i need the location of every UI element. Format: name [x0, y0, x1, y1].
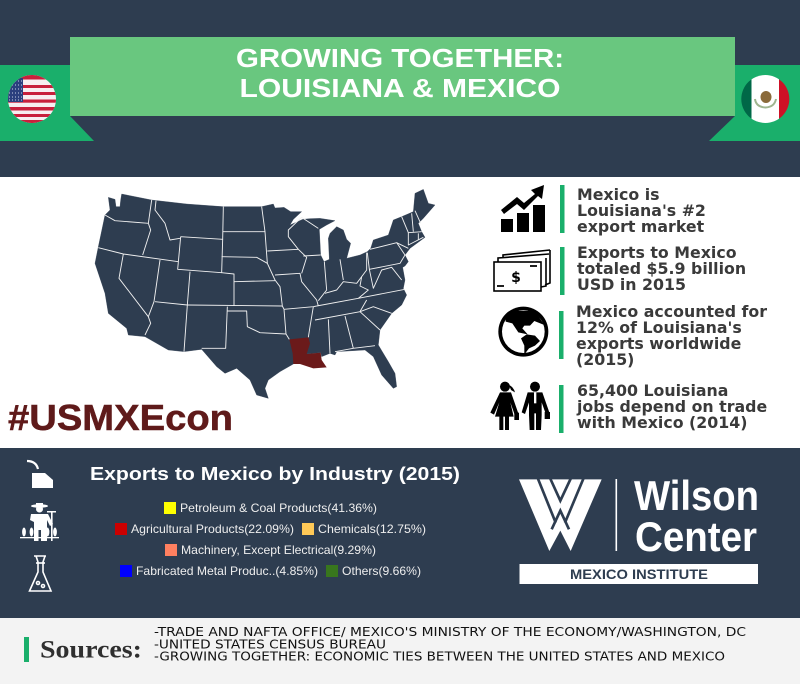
text: jobs depend on trade: [576, 397, 767, 416]
wordmark: Wilson: [634, 472, 759, 519]
accent bar: [559, 385, 564, 433]
fact: export market: [501, 185, 706, 236]
icon: US flag: [8, 75, 56, 124]
icon: farmer: [20, 503, 59, 541]
accent bar: [560, 247, 564, 295]
title banner: [70, 37, 735, 116]
text: Mexico accounted for: [576, 302, 767, 321]
text: Mexico is: [577, 185, 660, 204]
legend: Agricultural Products(22.09%): [131, 522, 294, 536]
logo: Wilson Center Mexico Institute: MEXICO INSTITUTE: [570, 567, 708, 582]
icon: growth chart: [501, 185, 545, 232]
state borders: [98, 200, 423, 353]
legend: [115, 501, 426, 578]
Louisiana: [289, 337, 327, 368]
legend: Chemicals(12.75%): [318, 522, 426, 536]
panel: sources: Sources:: [40, 636, 142, 664]
W mark: [519, 478, 602, 551]
text: exports worldwide: [576, 334, 741, 353]
text: totaled $5.9 billion: [577, 259, 746, 278]
fact: share of exports: [498, 302, 767, 369]
icon: business people: [490, 382, 550, 430]
fact: total exports: $: [511, 270, 521, 286]
icon: Mexico flag: [741, 75, 790, 123]
text: [577, 243, 746, 294]
fact: jobs: [490, 381, 767, 433]
text: export market: [577, 217, 705, 236]
hashtag: #USMXEcon: [8, 397, 233, 438]
accent bar: [560, 185, 564, 233]
title: [236, 45, 564, 103]
icon: cash stack: [494, 250, 550, 291]
panel: exports by industry: [0, 448, 800, 618]
text: Louisiana's #2: [577, 201, 706, 220]
title: LOUISIANA & MEXICO: [240, 75, 560, 103]
panel: sources: -GROWING TOGETHER: ECONOMIC TIES BETWEEN THE UNITED STATES AND MEXICO: [154, 650, 725, 664]
fact: total exports: [494, 243, 746, 295]
icon: flask: [30, 556, 51, 591]
icon: globe: [498, 307, 548, 357]
legend: Petroleum & Coal Products(41.36%): [180, 501, 377, 515]
text: (2015): [576, 350, 634, 369]
right ribbon: [709, 65, 800, 141]
text: [576, 381, 767, 432]
panel: sources: [0, 618, 800, 684]
map: United States with Louisiana highlighted: [95, 189, 435, 398]
panel: sources: -TRADE AND NAFTA OFFICE/ MEXICO'S MINISTRY OF THE ECONOMY/WASHINGTON, DC: [154, 625, 746, 640]
text: 12% of Louisiana's: [576, 318, 742, 337]
panel: header: [0, 0, 800, 177]
legend: Machinery, Except Electrical(9.29%): [181, 543, 376, 557]
accent bar: [559, 311, 564, 359]
icon: oil can: [27, 461, 53, 488]
panel: sources: -UNITED STATES CENSUS BUREAU: [154, 638, 386, 652]
silhouette: [95, 189, 435, 398]
wordmark: [634, 472, 759, 560]
text: 65,400 Louisiana: [577, 381, 728, 400]
title: GROWING TOGETHER:: [236, 45, 564, 73]
left ribbon: [0, 65, 94, 141]
legend: Others(9.66%): [342, 564, 421, 578]
text: Exports to Mexico: [577, 243, 737, 262]
text: [576, 302, 767, 369]
chart heading: Exports to Mexico by Industry (2015): [90, 463, 460, 484]
text: USD in 2015: [577, 275, 686, 294]
logo: Wilson Center Mexico Institute: [519, 472, 759, 584]
text: [577, 185, 706, 236]
legend: Fabricated Metal Produc..(4.85%): [136, 564, 318, 578]
wordmark: Center: [635, 513, 757, 560]
text: with Mexico (2014): [577, 413, 747, 432]
